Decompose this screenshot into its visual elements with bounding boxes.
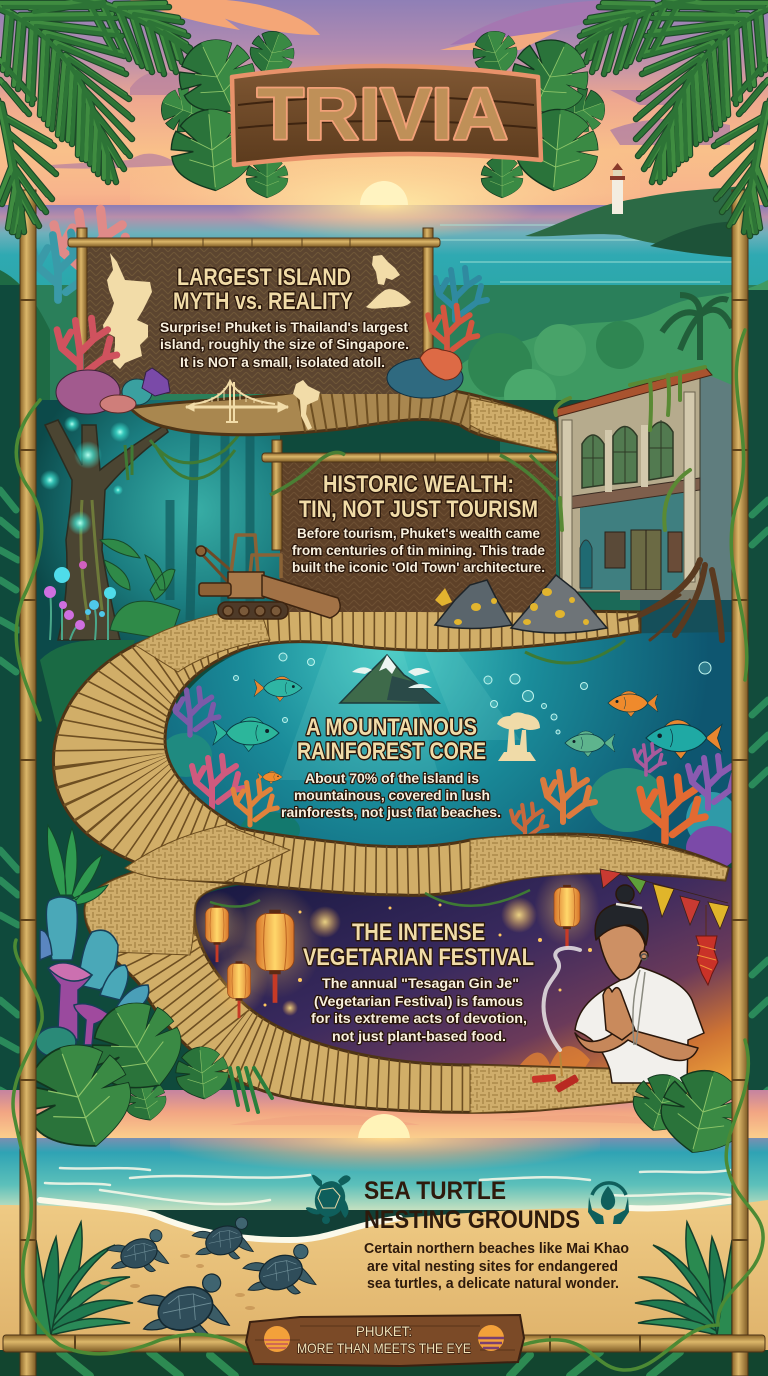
palm spray under bridge (230, 1068, 272, 1112)
bridge lower loop (85, 860, 645, 1113)
bright fern leaves (48, 825, 108, 905)
panel 4: vegetarian festival (188, 868, 729, 1093)
panel 3 heading: RAINFOREST CORE (297, 738, 486, 765)
bridge upper loop (53, 608, 730, 895)
panel 3 heading: A MOUNTAINOUS (306, 714, 477, 741)
panel 3 body: About 70% of the island is (305, 770, 479, 786)
mountain (340, 655, 439, 703)
Thailand and Singapore outlines (366, 255, 411, 309)
ground floor doors (580, 530, 682, 590)
panel 4 body: The annual "Tesagan Gin Je" (322, 975, 519, 991)
big brown tree (45, 420, 168, 640)
sky and sunset (0, 0, 768, 229)
panel 4 heading (303, 919, 534, 971)
coral behind panel 1 (32, 209, 487, 320)
climbing vines on frame (13, 330, 763, 1370)
arched windows (582, 422, 673, 488)
side foliage (0, 285, 768, 1140)
panel 2 body: Before tourism, Phuket's wealth came (297, 525, 540, 541)
panel 1 body: It is NOT a small, isolated atoll. (180, 354, 385, 370)
corals in pool (172, 688, 740, 842)
woven bamboo bridge (53, 384, 730, 1113)
bottom pole (3, 1335, 765, 1352)
foam (40, 1168, 735, 1240)
panel 4 body: (Vegetarian Festival) is famous (314, 993, 523, 1009)
monstera leaves around sign (155, 25, 611, 198)
panel 1 heading: MYTH vs. REALITY (173, 288, 353, 315)
shophouse building (553, 367, 732, 600)
firecrackers and incense on bridge (532, 1053, 579, 1093)
bridge and Thailand icon (186, 380, 320, 430)
panel 5: sea turtle nesting (100, 1175, 629, 1345)
panel 1 body: island, roughly the size of Singapore. (160, 336, 409, 352)
panel 1: largest island (32, 209, 487, 430)
panel 5 body (364, 1241, 629, 1292)
panel 1 heading: LARGEST ISLAND (177, 264, 351, 291)
panel 3 body: rainforests, not just flat beaches. (281, 804, 501, 820)
vines on panel 2 (270, 452, 558, 500)
panel 5 body: sea turtles, a delicate natural wonder. (367, 1276, 619, 1292)
title sign: TRIVIA (155, 25, 611, 198)
bottom foliage (0, 1350, 768, 1376)
jungle midground (0, 270, 768, 440)
left sunset badge (264, 1326, 290, 1352)
roots (620, 560, 722, 640)
panel 3: mountainous rainforest (281, 640, 625, 820)
firecracker string (696, 905, 718, 985)
panel 5 heading (364, 1177, 580, 1234)
beach palm sprays (36, 1222, 732, 1335)
title text: TRIVIA (257, 74, 508, 155)
left palm (0, 0, 190, 236)
footer text: MORE THAN MEETS THE EYE (297, 1340, 471, 1356)
fish (213, 676, 722, 784)
moss (555, 367, 705, 530)
turtle hatchlings (105, 1216, 317, 1345)
Phuket map (103, 253, 152, 369)
lower sunset, sea and beach (0, 1090, 768, 1376)
lighthouse (610, 163, 625, 214)
glowing flowers (44, 561, 116, 640)
panel 5 body: are vital nesting sites for endangered (367, 1259, 618, 1275)
tin mining excavator (196, 535, 340, 619)
hanging vines (210, 890, 530, 907)
panel 4 body (311, 975, 527, 1044)
large monstera leaves lower left (11, 987, 230, 1164)
panel 4 body: for its extreme acts of devotion, (311, 1010, 527, 1026)
monstera lower right (626, 1061, 754, 1163)
sea and distant headland (0, 163, 768, 305)
hanging forest vines (125, 432, 240, 480)
turtle tracks (100, 1254, 255, 1310)
bamboo frame panel 2 (262, 440, 557, 550)
turtle icon (306, 1175, 351, 1224)
conservation hands icon (588, 1183, 629, 1224)
footer plaque (246, 1315, 524, 1366)
panel 2 body: built the iconic 'Old Town' architecture. (292, 559, 545, 575)
bunting flags (600, 869, 729, 929)
tin ore piles (435, 575, 607, 633)
reef mounds (160, 733, 738, 870)
panel 2 heading: HISTORIC WEALTH: (323, 471, 514, 498)
footer text: PHUKET: (356, 1323, 412, 1339)
panel 5 heading: NESTING GROUNDS (364, 1206, 580, 1234)
glowing spores (40, 416, 130, 535)
wooden board (232, 66, 541, 165)
panel 2: historic wealth (196, 440, 607, 633)
left pole (20, 190, 36, 1376)
panel 2 heading (299, 471, 538, 523)
panel 4 body: not just plant-based food. (332, 1028, 506, 1044)
ferns (100, 539, 180, 640)
lanterns (188, 868, 600, 1018)
bridge top arc (130, 384, 557, 452)
footer text (297, 1323, 471, 1356)
blue coral (36, 897, 149, 1057)
right sunset badge (478, 1325, 504, 1351)
panel 1 body (160, 319, 409, 370)
panel 3 heading (297, 714, 486, 765)
distant trunks (170, 430, 250, 620)
panel 5 body: Certain northern beaches like Mai Khao (364, 1241, 629, 1257)
top corner palms (0, 0, 768, 236)
lower left reef and foliage (11, 825, 754, 1164)
panel 2 body (292, 525, 545, 575)
coral cluster left (56, 318, 170, 414)
right palm (578, 0, 768, 236)
underwater pool (160, 632, 740, 870)
deep forest backdrop (0, 400, 768, 1140)
panel 4 heading: VEGETARIAN FESTIVAL (303, 944, 534, 971)
bubbles (234, 653, 711, 734)
panel 2 heading: TIN, NOT JUST TOURISM (299, 496, 538, 523)
panel 5 heading: SEA TURTLE (364, 1177, 506, 1205)
right pole (732, 190, 748, 1376)
praying man (575, 885, 704, 1083)
panel 1 body: Surprise! Phuket is Thailand's largest (160, 319, 408, 335)
bamboo frame panel 1 (68, 228, 440, 353)
vine over pool (525, 640, 625, 663)
panel 1 heading (173, 264, 353, 315)
panel 4 heading: THE INTENSE (352, 919, 485, 946)
panel 3 body (281, 770, 501, 820)
rainforest icon (497, 712, 540, 761)
incense smoke (544, 948, 580, 1050)
coral cluster right (387, 306, 477, 398)
night festival panel (189, 868, 745, 1095)
panel 3 body: mountainous, covered in lush (294, 787, 490, 803)
panel 2 body: from centuries of tin mining. This trade (292, 542, 545, 558)
